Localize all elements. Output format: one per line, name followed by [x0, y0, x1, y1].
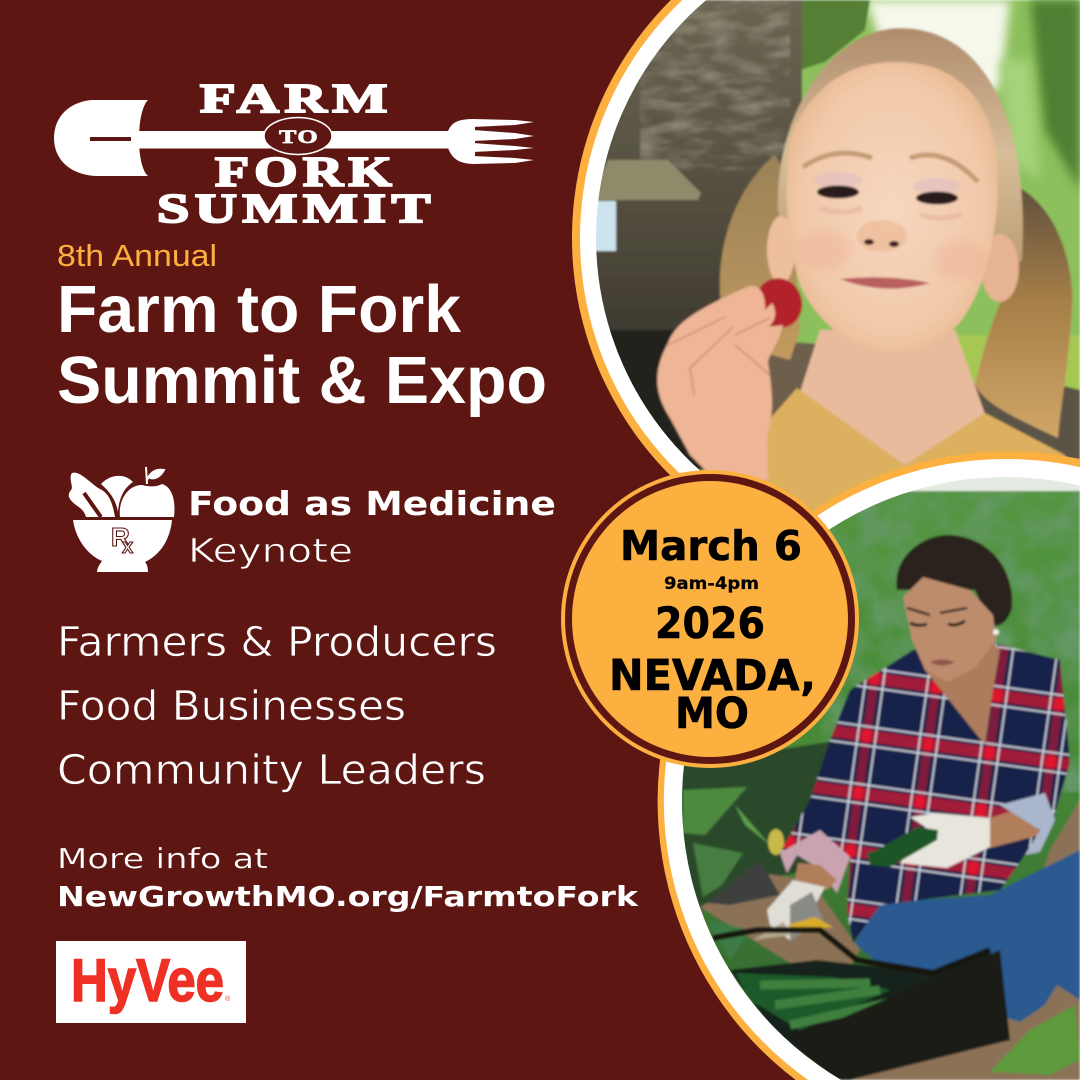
sky patch [590, 201, 616, 251]
trowel handle [787, 917, 833, 930]
photo panel: woman harvesting zucchini [658, 451, 1080, 1080]
sponsor logo: Hy-Vee: HyVee [71, 947, 224, 1014]
fork [448, 119, 534, 164]
date badge [561, 470, 859, 768]
eyes [910, 621, 965, 625]
pigtail right [975, 185, 1072, 438]
greenhouse strip [906, 477, 1080, 493]
squash flower [768, 829, 784, 855]
field texture [820, 492, 1080, 792]
stone slab [590, 160, 701, 200]
trowel [753, 922, 790, 940]
brows [803, 153, 978, 182]
audience list: Community Leaders [57, 746, 486, 794]
leaves top [800, 0, 870, 70]
text: keynote: Keynote [188, 531, 353, 570]
audience list [57, 618, 497, 794]
earring [993, 629, 999, 635]
eye shadow [814, 172, 861, 187]
shovel [54, 100, 148, 176]
neck [925, 640, 1000, 745]
neck [800, 330, 985, 466]
more info link [57, 842, 640, 913]
mulch [707, 860, 780, 905]
audience list: Food Businesses [57, 682, 406, 730]
shirt [760, 388, 1070, 510]
strawberry [758, 277, 804, 328]
more info link: NewGrowthMO.org/FarmtoFork [57, 880, 640, 913]
pigtail left [720, 155, 800, 360]
nose [857, 220, 907, 252]
logo: Farm to Fork Summit: FARM [200, 75, 393, 121]
Rx mark: R [111, 522, 130, 552]
eyes [817, 186, 859, 198]
rocks behind [768, 341, 816, 418]
dark foliage left [680, 740, 840, 910]
eyebrow: 8th Annual: 8th Annual [57, 238, 217, 273]
left forearm [795, 863, 837, 890]
zucchini held [867, 827, 938, 867]
icon: food bowl with Rx [69, 467, 174, 572]
date badge: NEVADA, [609, 651, 816, 701]
bark texture [640, 0, 790, 170]
hair [896, 535, 1012, 626]
text: keynote: Food as Medicine [188, 484, 556, 523]
logo: Farm to Fork Summit: FORK [215, 150, 397, 196]
lips [930, 660, 955, 666]
jeans [855, 850, 1080, 1022]
left cuff [780, 830, 850, 893]
dark lower trunk [610, 330, 706, 470]
left leaves [683, 787, 747, 835]
face [787, 62, 998, 351]
right forearm [990, 805, 1040, 848]
photo panel: girl holding a strawberry [572, 0, 1080, 511]
title: Farm to Fork [57, 272, 462, 347]
text: keynote [188, 484, 556, 570]
logo: Farm to Fork Summit [54, 75, 534, 231]
right cuff [1000, 793, 1055, 855]
crate zucchini [736, 973, 890, 1030]
ground [700, 800, 1080, 1080]
hand [657, 286, 783, 480]
sky [866, 0, 1010, 90]
mouth [840, 277, 930, 289]
apple [120, 484, 174, 517]
title: Summit & Expo [57, 343, 547, 418]
crate [713, 930, 990, 973]
grass right [950, 335, 1080, 390]
icon: food bowl with Rx: x [122, 536, 133, 558]
handle [138, 131, 456, 148]
ears [767, 216, 795, 284]
oval to [264, 118, 332, 154]
bottom right leaf [990, 1005, 1080, 1075]
date badge: March 6 [620, 522, 802, 570]
face [903, 577, 996, 682]
bowl [73, 520, 172, 572]
crate interior [730, 953, 1010, 1080]
logo: Farm to Fork Summit: TO [279, 127, 319, 148]
title [57, 272, 547, 418]
left glove [767, 880, 825, 940]
date badge: MO [675, 689, 749, 739]
date badge: 9am-4pm [664, 574, 759, 594]
more info link: More info at [57, 842, 268, 875]
greens [101, 476, 133, 512]
date badge: 2026 [655, 599, 765, 649]
under-eye shade [820, 208, 962, 218]
top hair [778, 28, 1023, 280]
leaf [69, 473, 115, 517]
cheeks [803, 232, 848, 268]
right glove [900, 813, 990, 868]
audience list: Farmers & Producers [57, 618, 497, 666]
sponsor logo: Hy-Vee: ® [225, 995, 231, 1003]
brows [907, 608, 967, 615]
logo: Farm to Fork Summit: SUMMIT [157, 185, 436, 231]
shirt plaid [780, 643, 1070, 943]
tree trunk [596, 0, 804, 332]
